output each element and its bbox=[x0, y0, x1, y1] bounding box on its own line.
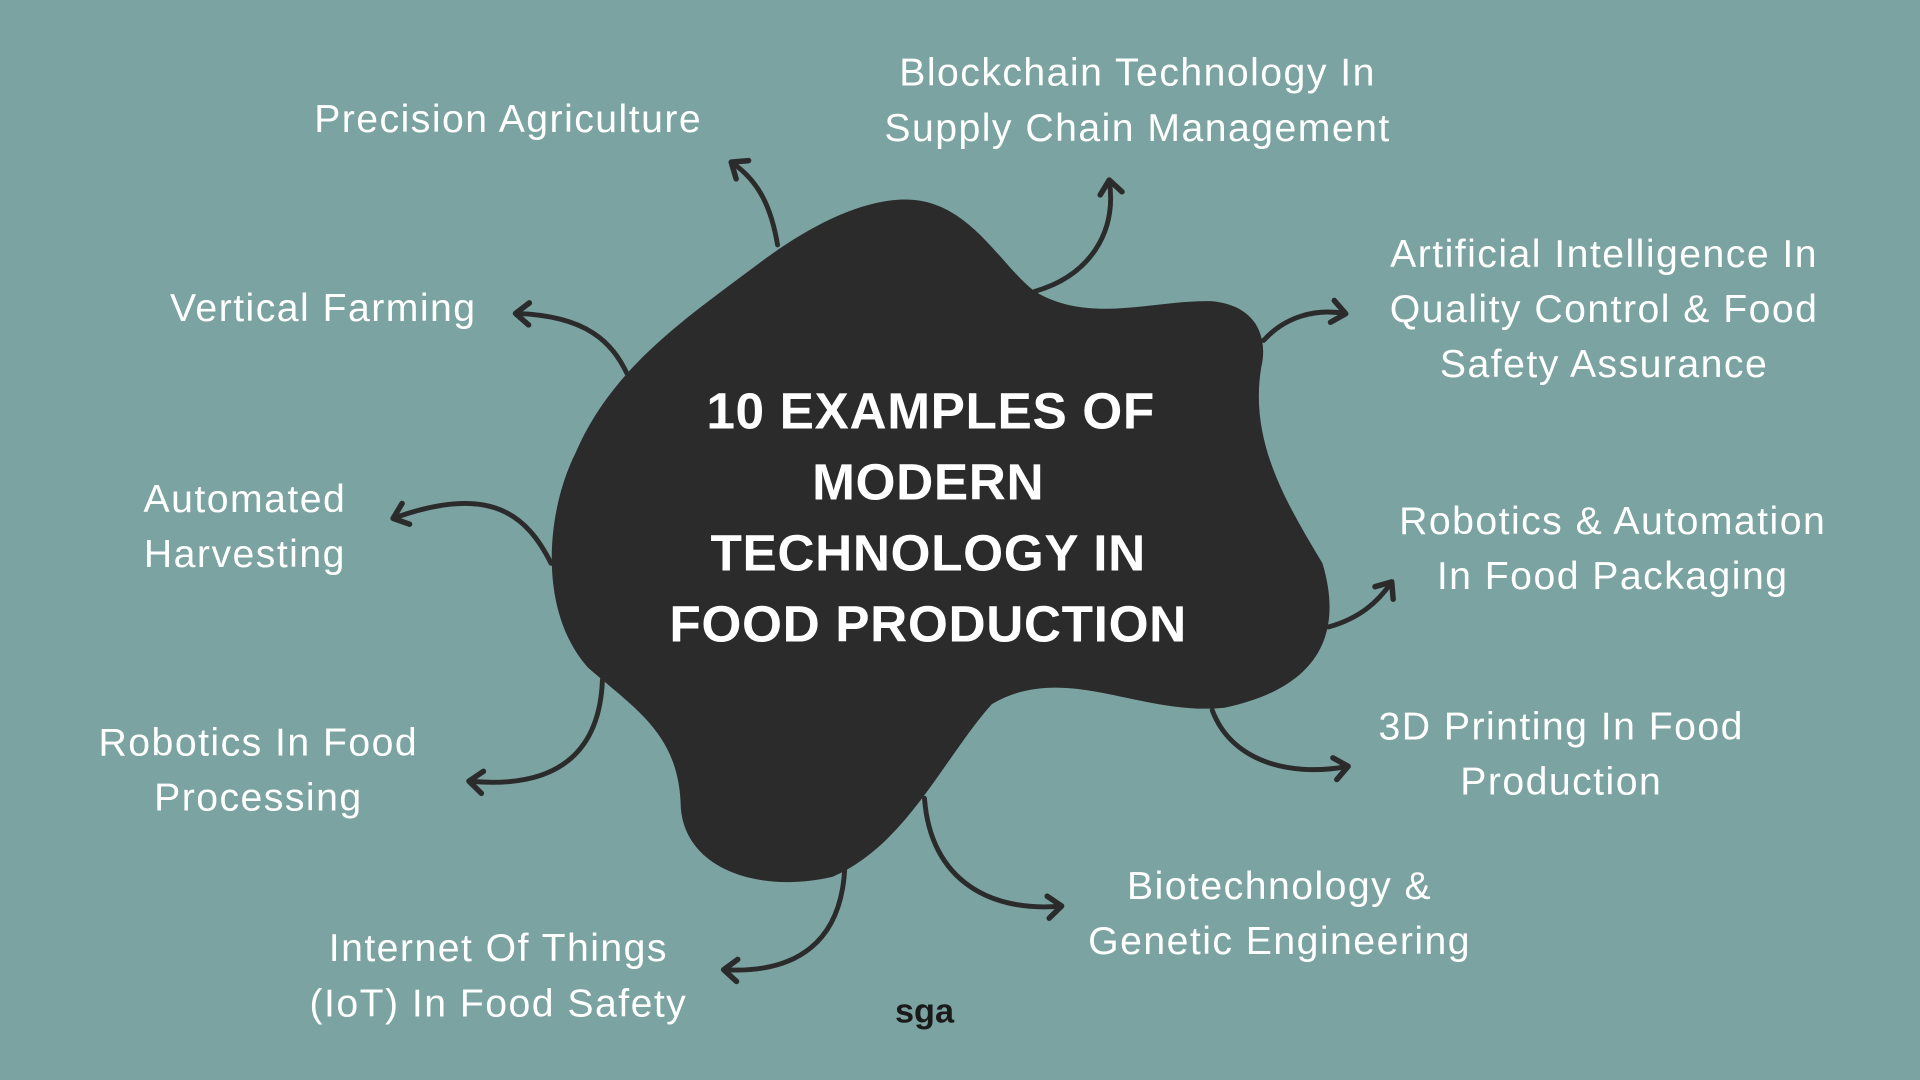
labels: Genetic Engineering bbox=[1088, 920, 1471, 963]
title: FOOD PRODUCTION bbox=[669, 595, 1187, 653]
logo: sga bbox=[895, 992, 955, 1030]
title: MODERN bbox=[812, 453, 1044, 511]
central blob bbox=[552, 199, 1330, 882]
arrows bbox=[394, 163, 1391, 970]
labels: Robotics & Automation bbox=[1399, 500, 1826, 543]
labels: Vertical Farming bbox=[170, 287, 477, 330]
title bbox=[669, 382, 1187, 653]
labels: Artificial Intelligence In bbox=[1390, 233, 1818, 276]
title: TECHNOLOGY IN bbox=[710, 524, 1146, 582]
labels: Quality Control & Food bbox=[1390, 288, 1818, 331]
labels: Production bbox=[1460, 761, 1662, 804]
labels: Automated bbox=[144, 478, 346, 521]
labels: Processing bbox=[154, 777, 363, 820]
labels: Harvesting bbox=[144, 533, 346, 576]
labels: Safety Assurance bbox=[1440, 343, 1768, 386]
labels: Robotics In Food bbox=[99, 722, 418, 765]
labels: (IoT) In Food Safety bbox=[310, 982, 687, 1025]
title: 10 EXAMPLES OF bbox=[706, 382, 1155, 440]
labels: Blockchain Technology In bbox=[899, 52, 1376, 95]
labels: In Food Packaging bbox=[1437, 555, 1788, 598]
labels: Internet Of Things bbox=[329, 927, 668, 970]
labels: 3D Printing In Food bbox=[1379, 706, 1744, 749]
labels: Supply Chain Management bbox=[884, 107, 1391, 150]
labels: Biotechnology & bbox=[1127, 865, 1432, 908]
labels: Precision Agriculture bbox=[314, 98, 702, 141]
